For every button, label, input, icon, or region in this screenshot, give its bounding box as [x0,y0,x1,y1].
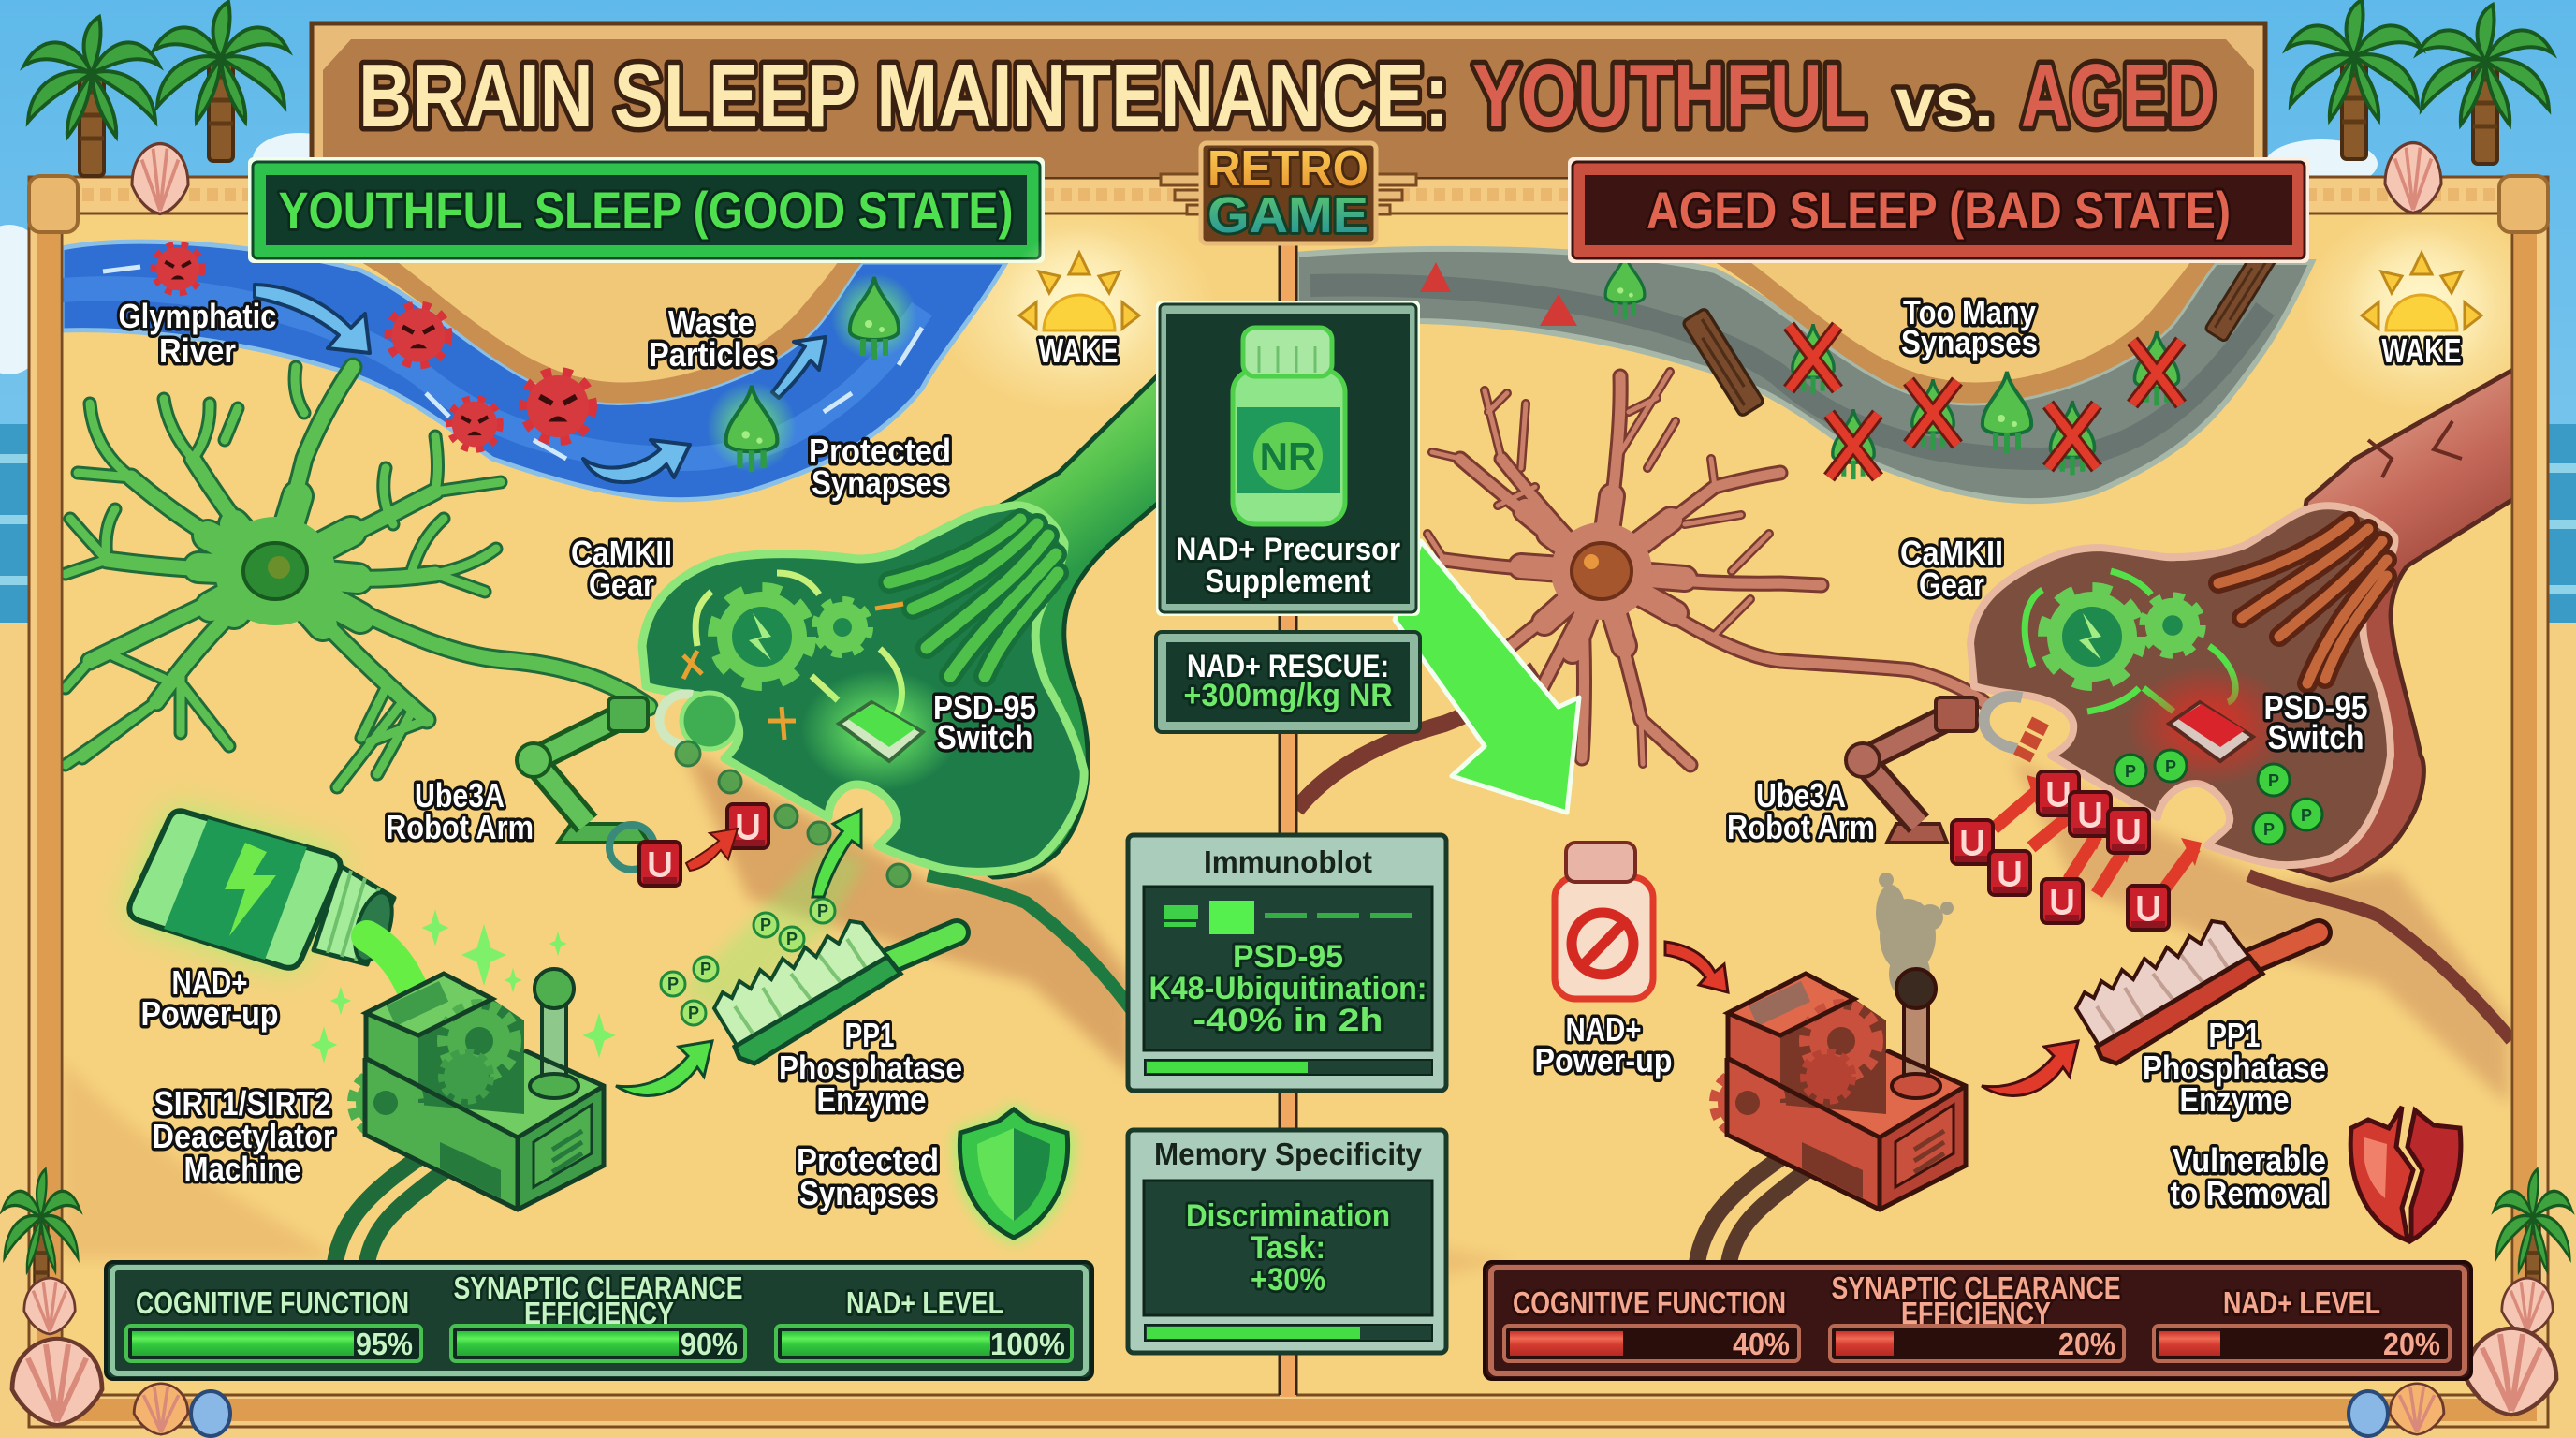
label: SIRT1/SIRT2 deacetylator machine: SIRT1/SIRT2 [154,1084,331,1123]
microfilament bundle [889,520,1058,676]
label: PSD-95 switch: Switch [2267,718,2364,756]
section header: aged: AGED SLEEP (BAD STATE) [1647,181,2231,240]
axon tail behind centre (aged) [1296,669,1535,810]
stat: synaptic clearance efficiency [451,1270,745,1361]
axon tail after synapse (healthy) [928,875,1133,1011]
label: SIRT1/SIRT2 deacetylator machine: Deacetylator [152,1117,335,1155]
label: too many synapses: Too Many [1903,293,2036,331]
rotation arrows [695,573,901,719]
label: protected synapses (shield) [797,1141,939,1212]
label: SIRT1/SIRT2 deacetylator machine [152,1084,335,1188]
phosphate tags: P [2268,771,2279,790]
palm trees: top left [24,2,288,176]
label: too many synapses: Synapses [1901,323,2038,361]
debris in aged river [1420,246,2277,417]
label: PSD-95 switch: PSD-95 [933,688,1036,726]
icon: sun (left) [1004,227,1154,377]
panel: NAD+ rescue dose: +300mg/kg NR [1183,678,1393,713]
sparkles [311,909,616,1064]
neuron: aged cracked [1404,372,1986,765]
icon: NR bottle: NR [1260,434,1316,478]
immunoblot stat: K48-Ubiquitination: [1149,971,1427,1006]
phosphate tags: P [2263,820,2275,839]
CaMKII gears [2045,590,2139,683]
stat: NAD+ level [776,1285,1072,1361]
tube cracks [2368,421,2462,477]
phosphate tags [2115,750,2322,844]
label: PP1 phosphatase enzyme [2143,1016,2326,1119]
supplement label: NAD+ Precursor [1176,532,1400,567]
panel: memory specificity [1128,1130,1446,1353]
flow arrows in river [255,285,826,482]
sand crescent inside river bend (right) [1715,262,2216,403]
protected synapses in river [707,273,917,472]
label: vulnerable to removal [2170,1141,2329,1212]
retro game logo [1201,140,1376,243]
section header: youthful: YOUTHFUL SLEEP (GOOD STATE) [279,181,1013,240]
label: NAD+ power-up: NAD+ [172,963,247,1002]
waste particles in river [156,247,589,447]
label: SIRT1/SIRT2 deacetylator machine: Machine [183,1150,301,1188]
label: PSD-95 switch: PSD-95 [2263,688,2368,726]
neuron: healthy green [66,367,649,787]
PP1 phosphatase brush: aged [2076,921,2319,1064]
stat: synaptic clearance efficiency: EFFICIENCY [1901,1296,2051,1330]
retro game logo: RETRO [1208,140,1368,197]
palm trees: bottom corners [2,1169,2572,1305]
label: PP1 phosphatase enzyme: PP1 [844,1016,895,1054]
label: NAD+ power-up: NAD+ [1565,1010,1642,1049]
label: protected synapses (river) [809,432,951,502]
label: NAD+ power-up [140,963,279,1033]
memory stat: +30% [1251,1262,1325,1298]
aged river: sluggish grey [1296,249,2312,501]
label: PP1 phosphatase enzyme [779,1016,962,1119]
logo wings [1161,174,1416,214]
label: protected synapses (river): Protected [809,432,951,470]
panel: NAD+ rescue dose [1156,632,1420,732]
CaMKII gears [715,590,809,683]
stat: synaptic clearance efficiency: 20% [2058,1327,2115,1361]
label: Ube3A robot arm: Ube3A [415,776,505,814]
stat: synaptic clearance efficiency: EFFICIENCY [524,1296,674,1330]
no-supplement NAD+ bottle [1555,843,1653,999]
panel: sandy play field [62,213,2512,1395]
label: glymphatic river: River [159,331,236,370]
stat: NAD+ level [2154,1285,2450,1361]
stat: cognitive function: COGNITIVE FUNCTION [136,1285,409,1320]
label: vulnerable to removal: to Removal [2170,1174,2329,1212]
phosphate spray from brush: P [700,960,711,978]
panel: memory specificity: Memory Specificity [1154,1137,1423,1171]
label: vulnerable to removal: Vulnerable [2173,1141,2326,1180]
label: waste particles [649,303,776,374]
label: Ube3A robot arm: Ube3A [1756,776,1846,814]
vesicles leaving synapse [676,741,910,887]
label: CaMKII gear: Gear [589,565,654,604]
label: Ube3A robot arm [386,776,534,846]
title text: vs. [1895,64,1994,141]
panel: immunoblot [1128,835,1446,1091]
memory progress bar [1145,1325,1432,1341]
stat: NAD+ level: 100% [990,1327,1065,1361]
immunoblot stat: PSD-95 [1233,939,1343,975]
PP1 phosphatase brush: healthy [714,921,957,1064]
Ube3A robot arm: healthy [517,693,738,870]
Ube3A robot arm: aged [1846,697,2041,843]
stat: cognitive function: COGNITIVE FUNCTION [1513,1285,1786,1320]
labels: youthful side [118,297,1118,1212]
phosphate spray from brush: P [786,930,798,948]
PSD-95 switch [800,669,959,791]
cleanup arrow: aged [1982,1041,2078,1095]
label: NAD+ power-up: Power-up [1535,1041,1672,1079]
panel: NR supplement [1156,301,1420,616]
panel: NAD+ rescue dose: NAD+ RESCUE: [1187,649,1389,684]
title plaque [312,23,2265,177]
section header: aged [1568,157,2309,263]
label: NAD+ power-up: Power-up [140,994,279,1033]
big green rescue arrow [1395,541,1579,813]
synaptic terminal: aged [1970,367,2518,880]
icon: sun (right) [2347,227,2496,377]
label: wake: WAKE [1039,331,1118,370]
immunoblot stat: -40% in 2h [1193,1003,1383,1038]
stat: synaptic clearance efficiency: 90% [681,1327,738,1361]
machine tubes: healthy [335,1156,457,1263]
immunoblot stat [1149,939,1427,1038]
section header: youthful [248,157,1045,263]
label: too many synapses [1901,293,2038,361]
sparks [683,604,903,740]
title text: AGED [2021,46,2216,146]
stat: cognitive function: 40% [1733,1327,1790,1361]
title text: BRAIN SLEEP MAINTENANCE: [359,46,1449,146]
label: CaMKII gear: Gear [1919,565,1984,604]
label: protected synapses (shield): Synapses [799,1174,936,1212]
label: PSD-95 switch [2263,688,2368,756]
phosphate spray from brush [661,847,866,1025]
label: CaMKII gear: CaMKII [1900,534,2003,572]
terminal tube [2284,367,2518,880]
label: glymphatic river: Glymphatic [118,297,277,335]
centre divider [1280,243,1296,1397]
title text: YOUTHFUL [1472,46,1866,146]
memory stat: Task: [1251,1230,1325,1266]
label: CaMKII gear [1900,534,2003,604]
stat: synaptic clearance efficiency: SYNAPTIC CLEARANCE [453,1270,743,1305]
stat: cognitive function: 95% [356,1327,413,1361]
stat: NAD+ level: 20% [2383,1327,2440,1361]
shield: protected [956,1105,1073,1242]
ubiquitin tags: aged overload [1952,771,2202,930]
sand crescent inner (right) [1750,262,2190,382]
label: protected synapses (river): Synapses [812,463,948,502]
panel: immunoblot: Immunoblot [1204,844,1372,879]
rotation arrows [2025,571,2235,712]
stat: synaptic clearance efficiency [1830,1270,2124,1361]
sand shading [62,206,2546,1311]
machine tubes: aged [1697,1156,1819,1263]
PSD-95 switch [2125,665,2293,786]
microfilament bundle [2218,521,2387,683]
labels: aged side [1535,293,2462,1212]
axon tail after synapse (aged) [2248,875,2511,1040]
machine smoke [1876,873,1954,1000]
label: glymphatic river [118,297,277,370]
supplement label [1176,532,1400,599]
label: PP1 phosphatase enzyme: Phosphatase [779,1049,962,1087]
phosphate spray from brush: P [760,916,771,934]
label: waste particles: Particles [649,335,776,374]
synapses marked for removal [1789,324,2181,479]
immunoblot progress bar [1145,1060,1432,1075]
green arrow into synapse [812,810,861,897]
stat: cognitive function [1504,1285,1799,1361]
SIRT1/SIRT2 deacetylator machine: aged [1718,969,1966,1210]
supplement label: Supplement [1206,564,1370,599]
label: waste particles: Waste [668,303,754,342]
stat: cognitive function [126,1285,421,1361]
label: PP1 phosphatase enzyme: Phosphatase [2143,1049,2326,1087]
terminal interior [642,506,1084,872]
phosphate tags: P [2301,806,2312,825]
icon: NR bottle [1233,328,1345,524]
sand crescent inner (left) [398,262,838,382]
terminal tube [936,373,1161,877]
status panel: youthful [106,1262,1092,1379]
label: NAD+ power-up [1535,1010,1672,1079]
label: wake: WAKE [2381,331,2462,370]
label: CaMKII gear: CaMKII [571,534,672,572]
status panel: aged [1485,1262,2471,1379]
label: Ube3A robot arm: Robot Arm [386,808,534,846]
phosphate spray from brush: P [667,975,679,993]
SIRT1/SIRT2 deacetylator machine: healthy [356,969,604,1210]
terminal interior [1970,506,2394,865]
cleanup arrow: healthy [616,1041,712,1095]
phosphate spray from brush: P [817,902,828,920]
palm trees: top right [2287,0,2553,164]
stat: NAD+ level: NAD+ LEVEL [2223,1285,2380,1320]
phosphate tags: P [2125,762,2136,781]
synaptic terminal: healthy [642,373,1161,877]
label: CaMKII gear [571,534,672,604]
label: PSD-95 switch [933,688,1036,756]
NAD+ power-up battery [127,809,399,969]
red arrow to machine [1665,942,1728,992]
memory stat [1186,1198,1390,1298]
ubiquitin tags: healthy [639,804,768,886]
phosphate spray from brush: P [688,1004,699,1022]
blot bands [1164,901,1412,934]
label: PSD-95 switch: Switch [936,718,1033,756]
glymphatic river: clean blue [62,242,1006,500]
label: PP1 phosphatase enzyme: PP1 [2209,1016,2260,1054]
label: PP1 phosphatase enzyme: Enzyme [816,1080,927,1119]
label: Ube3A robot arm: Robot Arm [1727,808,1875,846]
NAD+ pour stream [367,936,421,1016]
label: PP1 phosphatase enzyme: Enzyme [2179,1080,2290,1119]
stat: synaptic clearance efficiency: SYNAPTIC CLEARANCE [1831,1270,2121,1305]
memory stat: Discrimination [1186,1198,1390,1234]
shield: vulnerable, broken [2350,1107,2461,1240]
retro game logo: GAME [1208,187,1368,243]
phosphate tags: P [2165,757,2176,776]
sand crescent inside river bend (left) [361,262,862,403]
stat: NAD+ level: NAD+ LEVEL [846,1285,1003,1320]
label: protected synapses (shield): Protected [797,1141,939,1180]
label: Ube3A robot arm [1727,776,1875,846]
